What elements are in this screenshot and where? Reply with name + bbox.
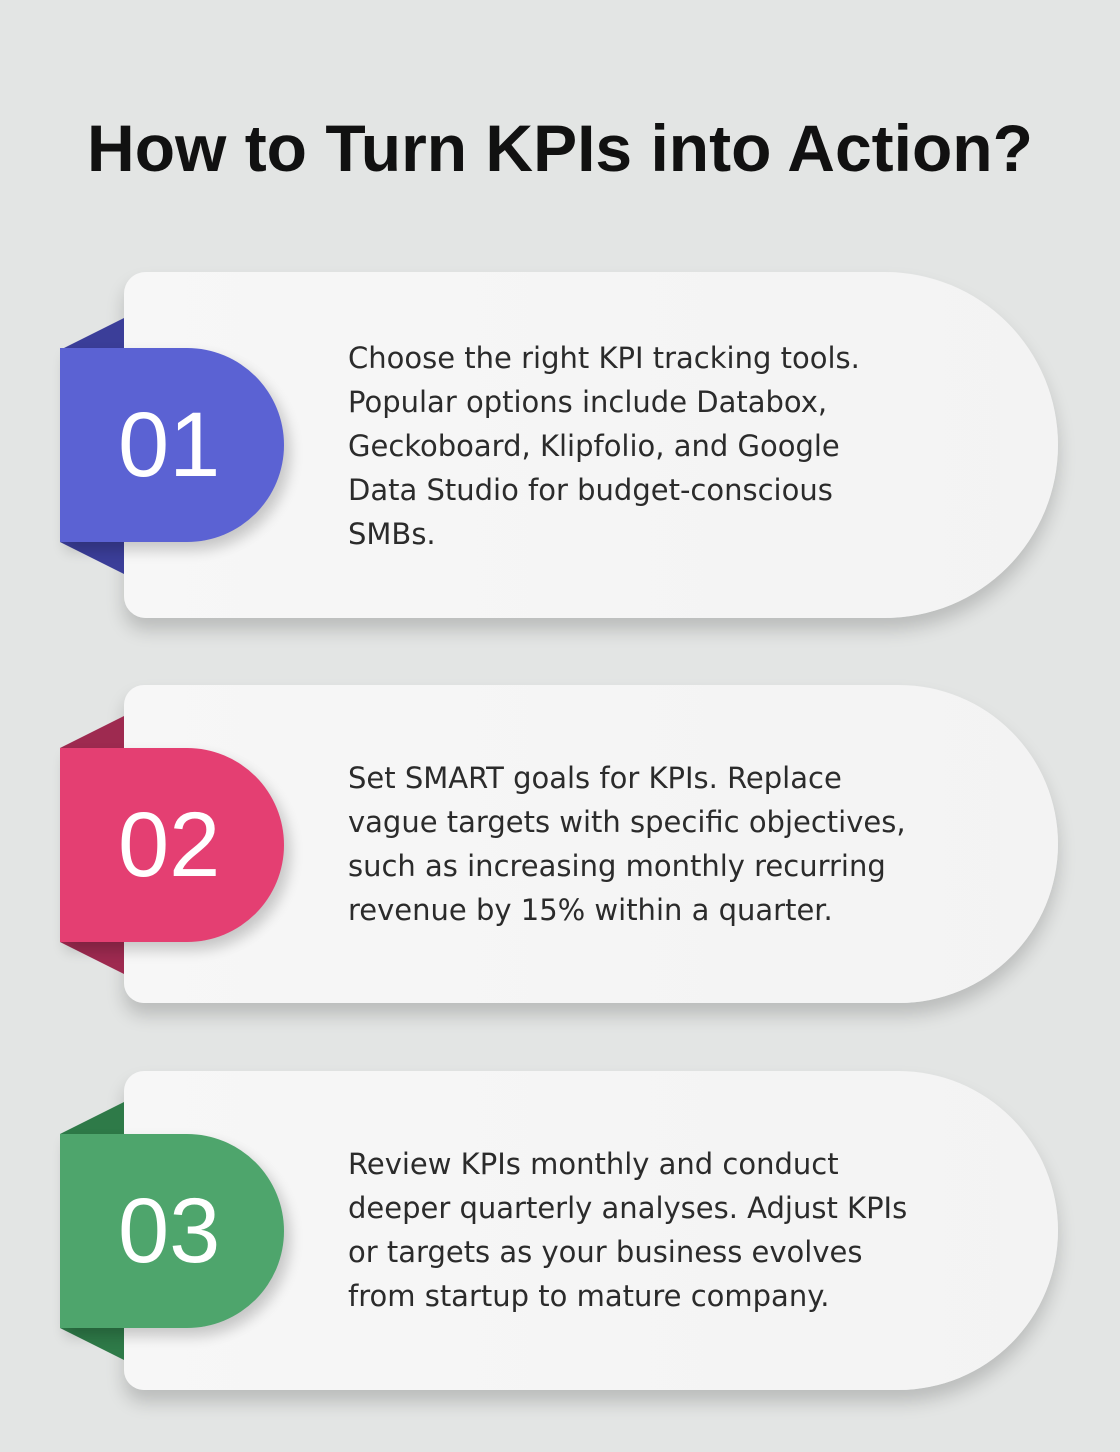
text: step 1: SMBs. xyxy=(348,517,436,551)
badge: 03: 03 xyxy=(118,1180,220,1282)
text: step 1 xyxy=(348,341,860,551)
panel: step 2 card xyxy=(124,685,1058,1003)
panel: step 3 card xyxy=(124,1071,1058,1390)
text: step 3: from startup to mature company. xyxy=(348,1279,829,1313)
text: step 2: such as increasing monthly recurring xyxy=(348,849,886,883)
text: step 2: revenue by 15% within a quarter. xyxy=(348,893,833,927)
badge: 02: 02 xyxy=(118,794,220,896)
text: step 3: Review KPIs monthly and conduct xyxy=(348,1147,839,1181)
text: step 2 xyxy=(348,761,906,927)
text: step 2: Set SMART goals for KPIs. Replace xyxy=(348,761,842,795)
text: step 3: or targets as your business evolves xyxy=(348,1235,862,1269)
badge: 03 xyxy=(60,1102,296,1360)
badge: 02 xyxy=(60,716,296,974)
text: step 3: deeper quarterly analyses. Adjust KPIs xyxy=(348,1191,907,1225)
title: How to Turn KPIs into Action? xyxy=(87,111,1033,185)
text: step 1: Popular options include Databox, xyxy=(348,385,827,419)
text: step 2: vague targets with specific objectives, xyxy=(348,805,906,839)
text: step 3 xyxy=(348,1147,907,1313)
text: step 1: Choose the right KPI tracking tools. xyxy=(348,341,860,375)
panel: step 1 card xyxy=(124,272,1058,618)
text: step 1: Data Studio for budget-conscious xyxy=(348,473,833,507)
badge: 01: 01 xyxy=(118,394,220,496)
badge: 01 xyxy=(60,318,296,574)
text: step 1: Geckoboard, Klipfolio, and Google xyxy=(348,429,840,463)
